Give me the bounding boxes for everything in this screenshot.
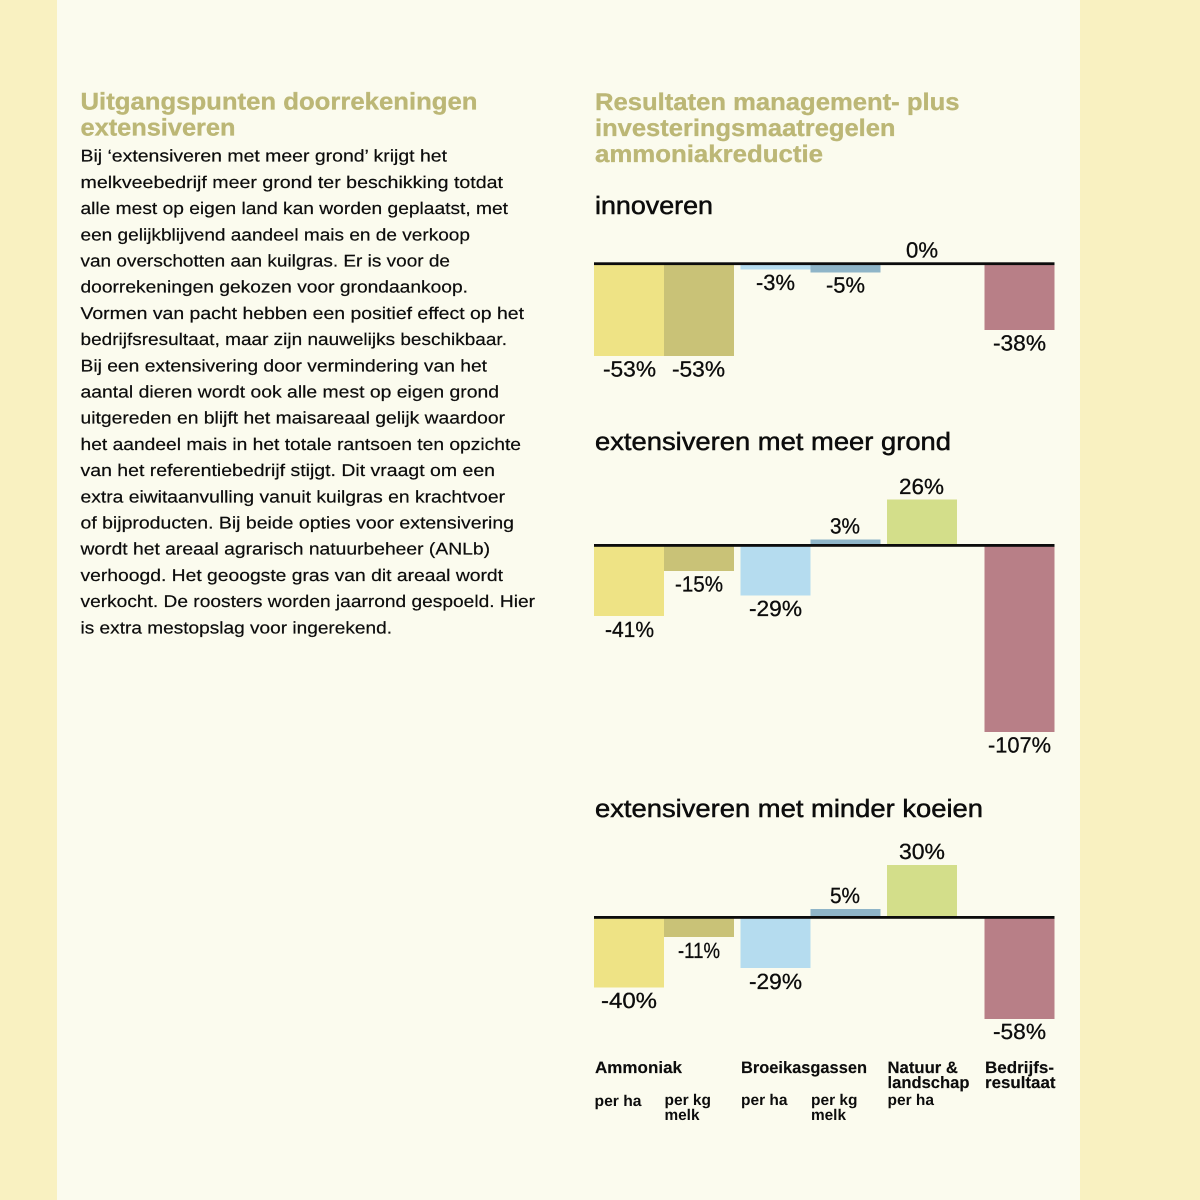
heading: uitgangspunten (80, 88, 478, 142)
body text block: van het referentiebedrijf stijgt. Dit vraagt om een (80, 461, 495, 480)
bar chart: extensiveren met meer grond: -41% (605, 617, 654, 642)
bar chart: extensiveren met minder koeien: -40% (601, 988, 657, 1013)
body text block: een gelijkblijvend aandeel mais en de verkoop (80, 225, 470, 244)
bar chart: innoveren: 0% (906, 238, 938, 262)
heading: uitgangspunten: extensiveren (80, 114, 236, 142)
category legend labels: resultaat (985, 1074, 1056, 1092)
bar chart: extensiveren met minder koeien: -29% (749, 969, 802, 994)
category legend labels: melk (811, 1107, 846, 1124)
body text block: extra eiwitaanvulling vanuit kuilgras en krachtvoer (80, 487, 505, 506)
bar chart: innoveren (594, 238, 1054, 382)
bar chart: innoveren: -5% (826, 272, 865, 298)
heading: resultaten: Resultaten management- plus (595, 89, 960, 116)
body text block: Vormen van pacht hebben een positief effect op het (80, 304, 524, 323)
bar chart: extensiveren met minder koeien: -11% (678, 938, 720, 963)
body text block (79, 147, 535, 637)
body text block: melkveebedrijf meer grond ter beschikking totdat (80, 173, 503, 192)
category legend labels: melk (664, 1107, 700, 1124)
body text block: Bij ‘extensiveren met meer grond’ krijgt het (80, 147, 447, 166)
body text block: of bijproducten. Bij beide opties voor extensivering (80, 514, 514, 532)
bar chart: extensiveren met minder koeien: -58% (993, 1019, 1046, 1044)
chart title: extensiveren met meer grond: extensiveren met meer grond (595, 428, 951, 456)
bar chart: innoveren: -53% (672, 356, 725, 382)
heading: uitgangspunten: Uitgangspunten doorrekeningen (80, 88, 478, 116)
category legend labels: per kg (811, 1092, 858, 1109)
bar chart: extensiveren met minder koeien (594, 839, 1054, 1044)
bar chart: extensiveren met meer grond: -107% (988, 732, 1051, 758)
body text block: aantal dieren wordt ook alle mest op eigen grond (80, 382, 499, 402)
category legend labels: Broeikasgassen (741, 1059, 867, 1077)
body text block: uitgereden en blijft het maisareaal gelijk waardoor (80, 409, 505, 428)
body text block: Bij een extensivering door vermindering van het (80, 356, 487, 375)
category legend labels: landschap (888, 1074, 970, 1092)
bar chart: innoveren: -53% (603, 356, 656, 382)
body text block: verkocht. De roosters worden jaarrond gespoeld. Hier (80, 592, 535, 611)
category legend labels: per ha (594, 1093, 642, 1110)
category legend labels: Natuur & (888, 1059, 958, 1077)
chart title: extensiveren met minder koeien: extensiveren met minder koeien (595, 795, 983, 823)
body text block: van overschotten aan kuilgras. Er is voor de (80, 252, 450, 270)
bar chart: extensiveren met minder koeien: 30% (899, 839, 945, 864)
body text block: is extra mestopslag voor ingerekend. (80, 618, 392, 637)
bar chart: extensiveren met meer grond: -15% (675, 572, 723, 596)
body text block: alle mest op eigen land kan worden geplaatst, met (80, 199, 508, 218)
body text block: doorrekeningen gekozen voor grondaankoop. (80, 278, 468, 297)
body text block: wordt het areaal agrarisch natuurbeheer (ANLb) (79, 540, 490, 559)
category legend labels (594, 1059, 1056, 1124)
body text block: verhoogd. Het geoogste gras van dit areaal wordt (80, 566, 503, 585)
body text block: het aandeel mais in het totale rantsoen ten opzichte (80, 435, 521, 454)
bar chart: innoveren: -38% (993, 330, 1046, 356)
chart title: innoveren: innoveren (595, 192, 713, 220)
heading: resultaten: investeringsmaatregelen (595, 115, 896, 142)
category legend labels: per ha (741, 1092, 788, 1109)
category legend labels: per kg (664, 1092, 711, 1109)
heading: resultaten (595, 89, 960, 168)
bar chart: extensiveren met meer grond: -29% (749, 596, 802, 621)
body text block: bedrijfsresultaat, maar zijn nauwelijks beschikbaar. (80, 330, 507, 349)
bar chart: extensiveren met minder koeien: 5% (830, 883, 860, 908)
bar chart: extensiveren met meer grond (594, 474, 1054, 758)
category legend labels: per ha (888, 1092, 934, 1109)
category legend labels: Bedrijfs- (985, 1059, 1054, 1077)
heading: resultaten: ammoniakreductie (595, 141, 823, 168)
bar chart: extensiveren met meer grond: 3% (830, 514, 860, 538)
category legend labels: Ammoniak (595, 1059, 683, 1077)
bar chart: innoveren: -3% (756, 270, 795, 295)
bar chart: extensiveren met meer grond: 26% (899, 474, 944, 499)
